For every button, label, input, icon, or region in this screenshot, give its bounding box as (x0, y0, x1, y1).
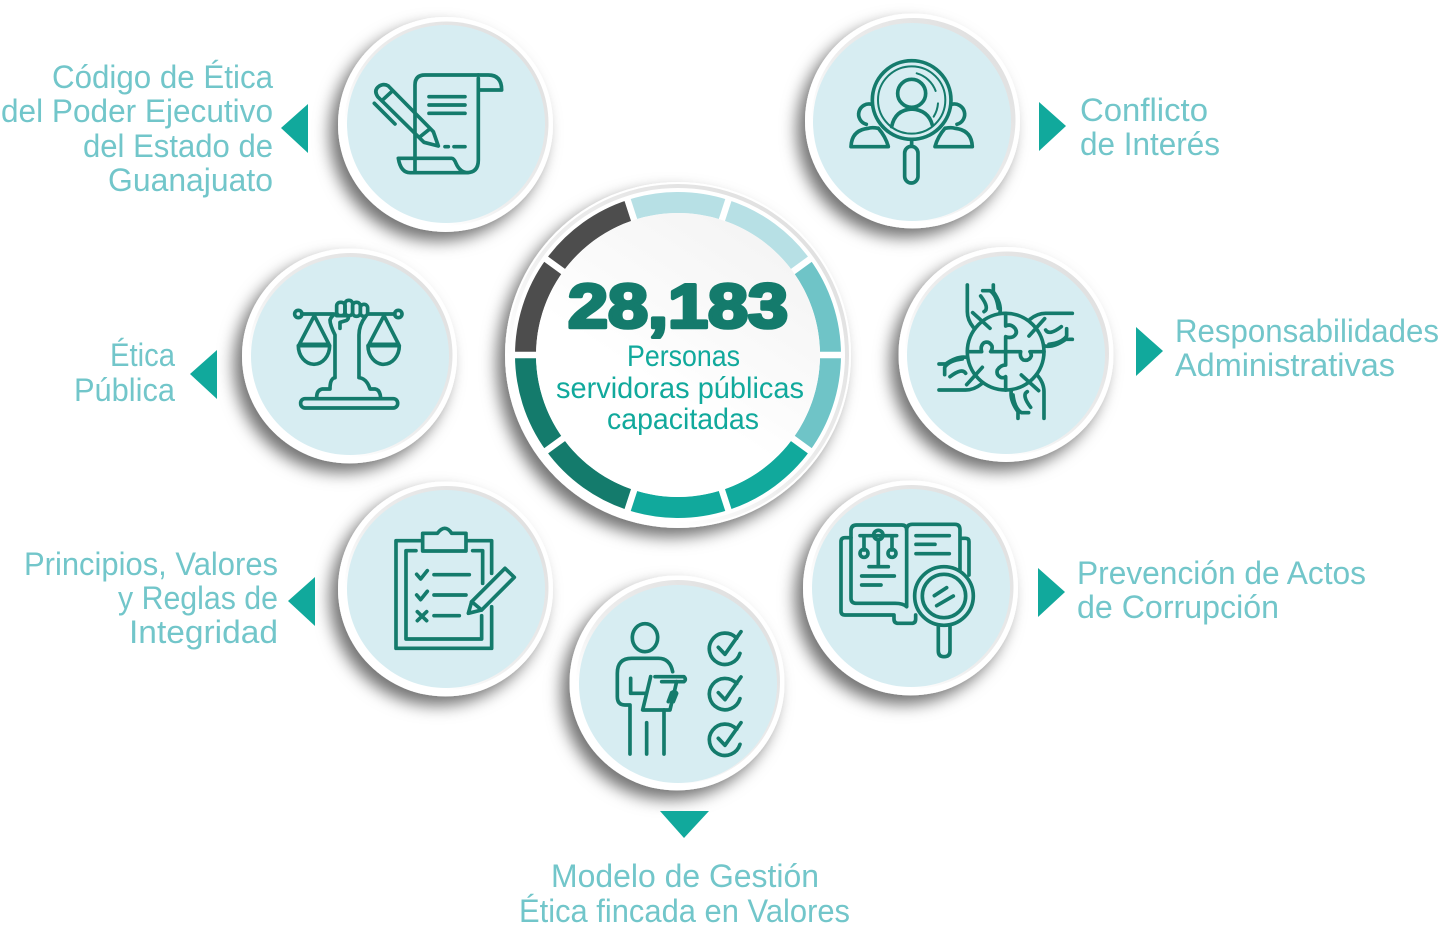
label: del Estado de (83, 128, 273, 164)
caption (556, 340, 804, 436)
arrow (288, 577, 315, 626)
icon: person with checklist (617, 624, 741, 755)
panel: Responsabilidades Administrativas (898, 247, 1439, 462)
central disc rim (507, 184, 849, 526)
label: de Corrupción (1077, 589, 1279, 625)
label (74, 337, 175, 408)
badge (338, 17, 553, 232)
label: de Interés (1080, 126, 1220, 162)
badge (242, 248, 457, 464)
panel: Principios, Valores y Reglas de Integridad (24, 482, 553, 696)
arrow (281, 104, 308, 153)
label: Administrativas (1175, 347, 1395, 383)
arrow (660, 811, 709, 838)
caption: capacitadas (607, 403, 759, 436)
label: y Reglas de (118, 580, 278, 616)
label: Conflicto (1080, 92, 1208, 128)
label: Modelo de Gestión (551, 858, 819, 894)
arrow (190, 350, 217, 399)
label: Ética (110, 337, 175, 373)
central disc (505, 182, 851, 528)
caption: Personas (627, 340, 740, 373)
label: Prevención de Actos (1077, 555, 1366, 591)
label: Responsabilidades (1175, 313, 1439, 349)
panel: Código de Ética (1, 17, 553, 232)
icon: magnifier over people (851, 61, 972, 183)
badge (803, 480, 1018, 696)
badge (570, 576, 784, 790)
icon: law book and magnifier (841, 524, 973, 657)
badge (805, 14, 1020, 228)
label (1175, 313, 1439, 383)
badge (338, 482, 553, 696)
badge (898, 247, 1114, 462)
ring chart: segmented ring (465, 142, 891, 568)
label (519, 858, 850, 929)
arrow (1136, 327, 1163, 376)
arrow (1038, 568, 1065, 617)
label: del Poder Ejecutivo (1, 93, 273, 129)
label (1, 59, 273, 198)
arrow (1039, 102, 1066, 151)
panel: Prevención de Actos de Corrupción (803, 480, 1366, 696)
label (24, 546, 278, 650)
icon: clipboard checklist (396, 528, 514, 648)
panel: Ética Pública (74, 248, 457, 464)
label: Integridad (129, 614, 278, 650)
label: Pública (74, 372, 175, 408)
panel: Modelo de Gestión Ética fincada en Valores (519, 576, 850, 929)
panel: Conflicto de Interés (805, 14, 1220, 228)
label (1077, 555, 1366, 625)
caption: servidoras públicas (556, 372, 804, 405)
icon: scroll and pen (374, 75, 502, 173)
label: Guanajuato (108, 162, 273, 198)
big number: 28,183 (568, 272, 788, 342)
label: Ética fincada en Valores (519, 893, 850, 929)
icon: fist holding scales (295, 300, 402, 408)
panel: central counter (465, 142, 891, 568)
icon: hands joining puzzle (939, 285, 1072, 418)
central disc face (536, 213, 820, 497)
label: Principios, Valores (24, 546, 278, 582)
label: Código de Ética (52, 59, 273, 95)
label (1080, 92, 1220, 162)
